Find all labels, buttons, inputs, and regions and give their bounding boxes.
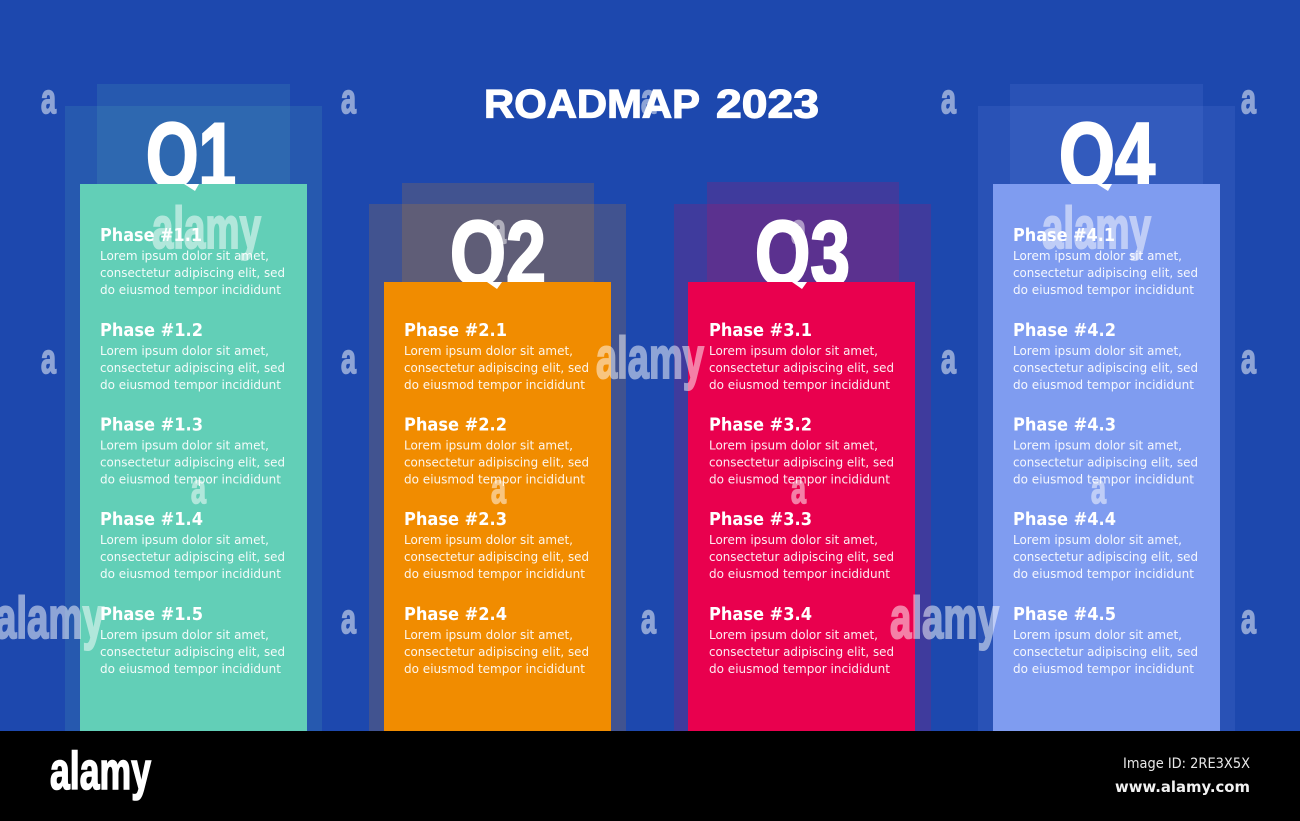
phase 1.3: consectetur adipiscing elit, sed xyxy=(100,454,285,470)
phase 3.1: do eiusmod tempor incididunt xyxy=(709,377,890,392)
phase 4.5: do eiusmod tempor incididunt xyxy=(1013,661,1194,676)
watermark overlay: a xyxy=(41,335,56,382)
watermark overlay: a xyxy=(191,465,206,512)
phase 2.4: consectetur adipiscing elit, sed xyxy=(404,644,589,659)
watermark overlay: a xyxy=(1091,465,1106,512)
title: ROADMAP xyxy=(484,82,700,126)
phase 2.1 xyxy=(404,320,589,392)
phase 4.3: Lorem ipsum dolor sit amet, xyxy=(1013,438,1182,452)
phase 1.4: Lorem ipsum dolor sit amet, xyxy=(100,532,269,547)
image id: Image ID: 2RE3X5X xyxy=(1123,756,1250,772)
phase 4.5 xyxy=(1013,604,1198,676)
panel: Q1 xyxy=(65,84,322,731)
phase 1.3: do eiusmod tempor incididunt xyxy=(100,472,281,486)
phase 2.2: Phase #2.2 xyxy=(404,414,507,436)
footer bar xyxy=(0,731,1300,821)
phase 2.3: Phase #2.3 xyxy=(404,509,507,530)
Q1 letter tail xyxy=(184,184,199,191)
phase 1.4 xyxy=(100,509,285,581)
phase 3.2: do eiusmod tempor incididunt xyxy=(709,472,890,486)
phase 2.2: do eiusmod tempor incididunt xyxy=(404,472,585,486)
footer logo: alamy xyxy=(50,742,151,801)
phase 4.2: consectetur adipiscing elit, sed xyxy=(1013,360,1198,375)
Q2 column xyxy=(384,282,611,731)
phase 4.4 xyxy=(1013,509,1198,581)
phase 4.1 xyxy=(1013,225,1198,297)
phase 4.1: consectetur adipiscing elit, sed xyxy=(1013,265,1198,280)
watermark overlay: a xyxy=(791,465,806,512)
panel: Q3 xyxy=(674,182,931,731)
phase 1.2 xyxy=(100,320,285,392)
phase 1.5: Phase #1.5 xyxy=(100,604,203,625)
watermark overlay: alamy xyxy=(1042,196,1151,261)
panel: Q2 xyxy=(369,183,626,731)
Q4 heading: Q4 xyxy=(1059,105,1155,207)
phase 2.3: consectetur adipiscing elit, sed xyxy=(404,549,589,564)
phase 4.5: Phase #4.5 xyxy=(1013,604,1116,625)
phase 3.1: consectetur adipiscing elit, sed xyxy=(709,360,894,375)
phase 1.3: Phase #1.3 xyxy=(100,414,203,436)
phase 4.2: Phase #4.2 xyxy=(1013,320,1116,341)
phase 3.1: Lorem ipsum dolor sit amet, xyxy=(709,343,878,358)
phase 4.2: Lorem ipsum dolor sit amet, xyxy=(1013,343,1182,358)
phase 4.2 xyxy=(1013,320,1198,392)
phase 2.4: Phase #2.4 xyxy=(404,604,507,625)
phase 3.1: Phase #3.1 xyxy=(709,320,812,341)
phase 4.3: do eiusmod tempor incididunt xyxy=(1013,472,1194,486)
phase 4.3: consectetur adipiscing elit, sed xyxy=(1013,454,1198,470)
phase 2.3: do eiusmod tempor incididunt xyxy=(404,566,585,581)
phase 1.1: Phase #1.1 xyxy=(100,225,202,246)
phase 1.2: do eiusmod tempor incididunt xyxy=(100,377,281,392)
watermark overlay: a xyxy=(41,75,56,122)
phase 4.4: Lorem ipsum dolor sit amet, xyxy=(1013,532,1182,547)
phase 3.4: Phase #3.4 xyxy=(709,604,812,625)
phase 3.2: Lorem ipsum dolor sit amet, xyxy=(709,438,878,452)
watermark overlay: a xyxy=(1241,75,1256,122)
phase 3.4: consectetur adipiscing elit, sed xyxy=(709,644,894,659)
phase 1.5 xyxy=(100,604,285,676)
phase 1.1: consectetur adipiscing elit, sed xyxy=(100,265,285,280)
phase 4.5: consectetur adipiscing elit, sed xyxy=(1013,644,1198,659)
Q3 backdrop xyxy=(674,182,931,731)
phase 2.3: Lorem ipsum dolor sit amet, xyxy=(404,532,573,547)
watermark overlay: a xyxy=(341,335,356,382)
Q2 backdrop xyxy=(369,183,626,731)
watermark overlay: a xyxy=(1241,335,1256,382)
website: www.alamy.com xyxy=(1115,778,1250,796)
watermark overlay: a xyxy=(941,75,956,122)
phase 1.1: do eiusmod tempor incididunt xyxy=(100,282,281,297)
phase 3.4 xyxy=(709,604,894,676)
phase 4.1: do eiusmod tempor incididunt xyxy=(1013,282,1194,297)
title: 2023 xyxy=(716,82,819,126)
phase 4.1: Lorem ipsum dolor sit amet, xyxy=(1013,248,1182,263)
phase 2.4: Lorem ipsum dolor sit amet, xyxy=(404,627,573,642)
phase 4.4: consectetur adipiscing elit, sed xyxy=(1013,549,1198,564)
watermark overlay: alamy xyxy=(596,326,704,391)
Q4 backdrop xyxy=(978,84,1235,731)
phase 2.1: do eiusmod tempor incididunt xyxy=(404,377,585,392)
phase 1.3 xyxy=(100,414,285,486)
phase 2.2: consectetur adipiscing elit, sed xyxy=(404,454,589,470)
phase 4.4: do eiusmod tempor incididunt xyxy=(1013,566,1194,581)
phase 1.3: Lorem ipsum dolor sit amet, xyxy=(100,438,269,452)
phase 1.4: Phase #1.4 xyxy=(100,509,203,530)
phase 1.1 xyxy=(100,225,285,297)
phase 3.3: Phase #3.3 xyxy=(709,509,812,530)
phase 1.1: Lorem ipsum dolor sit amet, xyxy=(100,248,269,263)
phase 1.4: do eiusmod tempor incididunt xyxy=(100,566,281,581)
phase 2.4 xyxy=(404,604,589,676)
phase 3.2 xyxy=(709,414,894,486)
watermark overlay: a xyxy=(341,595,356,642)
phase 2.1: Lorem ipsum dolor sit amet, xyxy=(404,343,573,358)
Q4 column xyxy=(993,184,1220,731)
phase 2.1: consectetur adipiscing elit, sed xyxy=(404,360,589,375)
watermark overlay: a xyxy=(941,335,956,382)
phase 1.4: consectetur adipiscing elit, sed xyxy=(100,549,285,564)
Q2 heading: Q2 xyxy=(450,203,546,305)
watermark overlay: a xyxy=(491,465,506,512)
phase 3.3 xyxy=(709,509,894,581)
phase 2.4: do eiusmod tempor incididunt xyxy=(404,661,585,676)
phase 4.3: Phase #4.3 xyxy=(1013,414,1116,436)
phase 3.1 xyxy=(709,320,894,392)
phase 1.5: consectetur adipiscing elit, sed xyxy=(100,644,285,659)
watermark overlay: a xyxy=(791,205,806,252)
Q3 letter tail xyxy=(792,282,807,289)
phase 2.2 xyxy=(404,414,589,486)
panel: Q4 xyxy=(978,84,1235,731)
Q4 letter tail xyxy=(1097,184,1112,191)
phase 3.3: do eiusmod tempor incididunt xyxy=(709,566,890,581)
Q3 column xyxy=(688,282,915,731)
phase 2.2: Lorem ipsum dolor sit amet, xyxy=(404,438,573,452)
phase 3.3: Lorem ipsum dolor sit amet, xyxy=(709,532,878,547)
Q1 column xyxy=(80,184,307,731)
phase 3.2: consectetur adipiscing elit, sed xyxy=(709,454,894,470)
watermark overlay: alamy xyxy=(890,586,999,651)
phase 2.1: Phase #2.1 xyxy=(404,320,507,341)
phase 4.4: Phase #4.4 xyxy=(1013,509,1116,530)
phase 1.2: consectetur adipiscing elit, sed xyxy=(100,360,285,375)
phase 4.5: Lorem ipsum dolor sit amet, xyxy=(1013,627,1182,642)
phase 3.3: consectetur adipiscing elit, sed xyxy=(709,549,894,564)
phase 4.2: do eiusmod tempor incididunt xyxy=(1013,377,1194,392)
Q2 letter tail xyxy=(487,282,502,289)
phase 4.1: Phase #4.1 xyxy=(1013,225,1115,246)
Q1 heading: Q1 xyxy=(146,105,236,207)
watermark overlay xyxy=(0,75,1256,651)
Q1 backdrop xyxy=(65,84,322,731)
phase 1.5: do eiusmod tempor incididunt xyxy=(100,661,281,676)
phase 1.2: Lorem ipsum dolor sit amet, xyxy=(100,343,269,358)
title xyxy=(484,82,819,126)
phase 3.2: Phase #3.2 xyxy=(709,414,812,436)
watermark overlay: alamy xyxy=(152,196,261,261)
watermark overlay: a xyxy=(641,75,656,122)
phase 2.3 xyxy=(404,509,589,581)
phase 1.5: Lorem ipsum dolor sit amet, xyxy=(100,627,269,642)
watermark overlay: a xyxy=(341,75,356,122)
phase 1.2: Phase #1.2 xyxy=(100,320,203,341)
Q3 heading: Q3 xyxy=(755,203,850,305)
watermark overlay: a xyxy=(641,595,656,642)
phase 3.4: Lorem ipsum dolor sit amet, xyxy=(709,627,878,642)
phase 3.4: do eiusmod tempor incididunt xyxy=(709,661,890,676)
watermark overlay: a xyxy=(1241,595,1256,642)
phase 4.3 xyxy=(1013,414,1198,486)
watermark overlay: a xyxy=(491,205,506,252)
